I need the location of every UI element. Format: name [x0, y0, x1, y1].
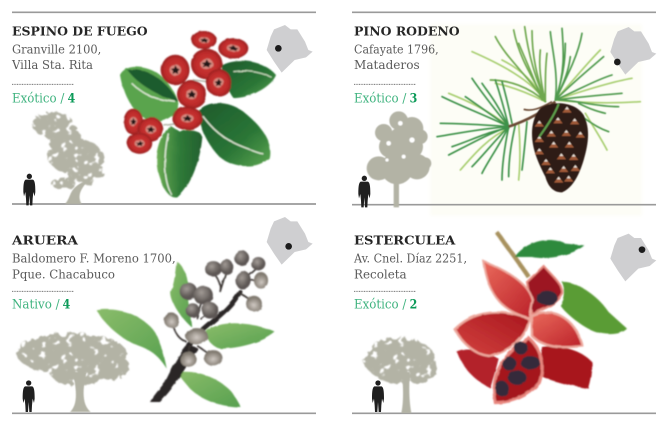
address: aruera [12, 252, 176, 281]
address: esterculea: Recoleta [354, 267, 407, 281]
address: pino rodeno [354, 42, 439, 72]
origin label: exótico 3: Exótico / [354, 91, 407, 106]
heading: espino de fuego: ESPINO DE FUEGO [12, 24, 148, 39]
address: espino de fuego [11, 42, 101, 72]
origin label: exótico 4: 4 [68, 91, 75, 106]
paper background: pino rodeno illustration [430, 24, 642, 216]
icon: tree silhouette [367, 111, 431, 207]
icon: human figure [23, 380, 35, 412]
icon: tree silhouette [33, 112, 104, 204]
origin label: nativo 4: 4 [63, 297, 70, 312]
panel: espino de fuego [11, 12, 316, 205]
address: espino de fuego: Granville 2100, [12, 42, 101, 56]
illustration: red berries and leaves [120, 31, 276, 198]
illustration: pine branch with cone [437, 27, 640, 192]
icon: tree silhouette [17, 333, 130, 412]
panel: esterculea [352, 232, 656, 413]
origin label: exótico 3: 3 [410, 91, 417, 106]
address: aruera: Baldomero F. Moreno 1700, [12, 252, 176, 266]
icon: human figure [372, 380, 384, 412]
origin label: exótico 4: Exótico / [12, 91, 65, 106]
illustration: aruera branch with buds [97, 250, 275, 407]
illustration: red star flower with seeds [455, 233, 627, 403]
panel: pino rodeno [352, 12, 656, 207]
icon: city map [267, 25, 313, 73]
heading: esterculea: ESTERCULEA [354, 232, 456, 247]
address: esterculea [353, 252, 467, 281]
icon: city map [610, 234, 656, 281]
origin label: exótico 2: 2 [410, 297, 417, 312]
origin label: exótico 2: Exótico / [354, 297, 407, 312]
address: pino rodeno: Cafayate 1796, [354, 42, 439, 56]
panel: aruera [11, 217, 316, 413]
icon: city map [267, 217, 313, 265]
origin label: nativo 4: Nativo / [12, 297, 60, 312]
address: pino rodeno: Mataderos [354, 58, 420, 72]
icon: city map [610, 27, 656, 75]
icon: tree silhouette [364, 338, 435, 413]
heading: pino rodeno: PINO RODENO [354, 24, 460, 39]
address: aruera: Pque. Chacabuco [12, 267, 115, 281]
heading: aruera: ARUERA [11, 232, 78, 247]
icon: human figure [358, 176, 370, 207]
address: esterculea: Av. Cnel. Díaz 2251, [353, 252, 467, 266]
icon: human figure [23, 174, 35, 205]
address: espino de fuego: Villa Sta. Rita [11, 58, 93, 72]
